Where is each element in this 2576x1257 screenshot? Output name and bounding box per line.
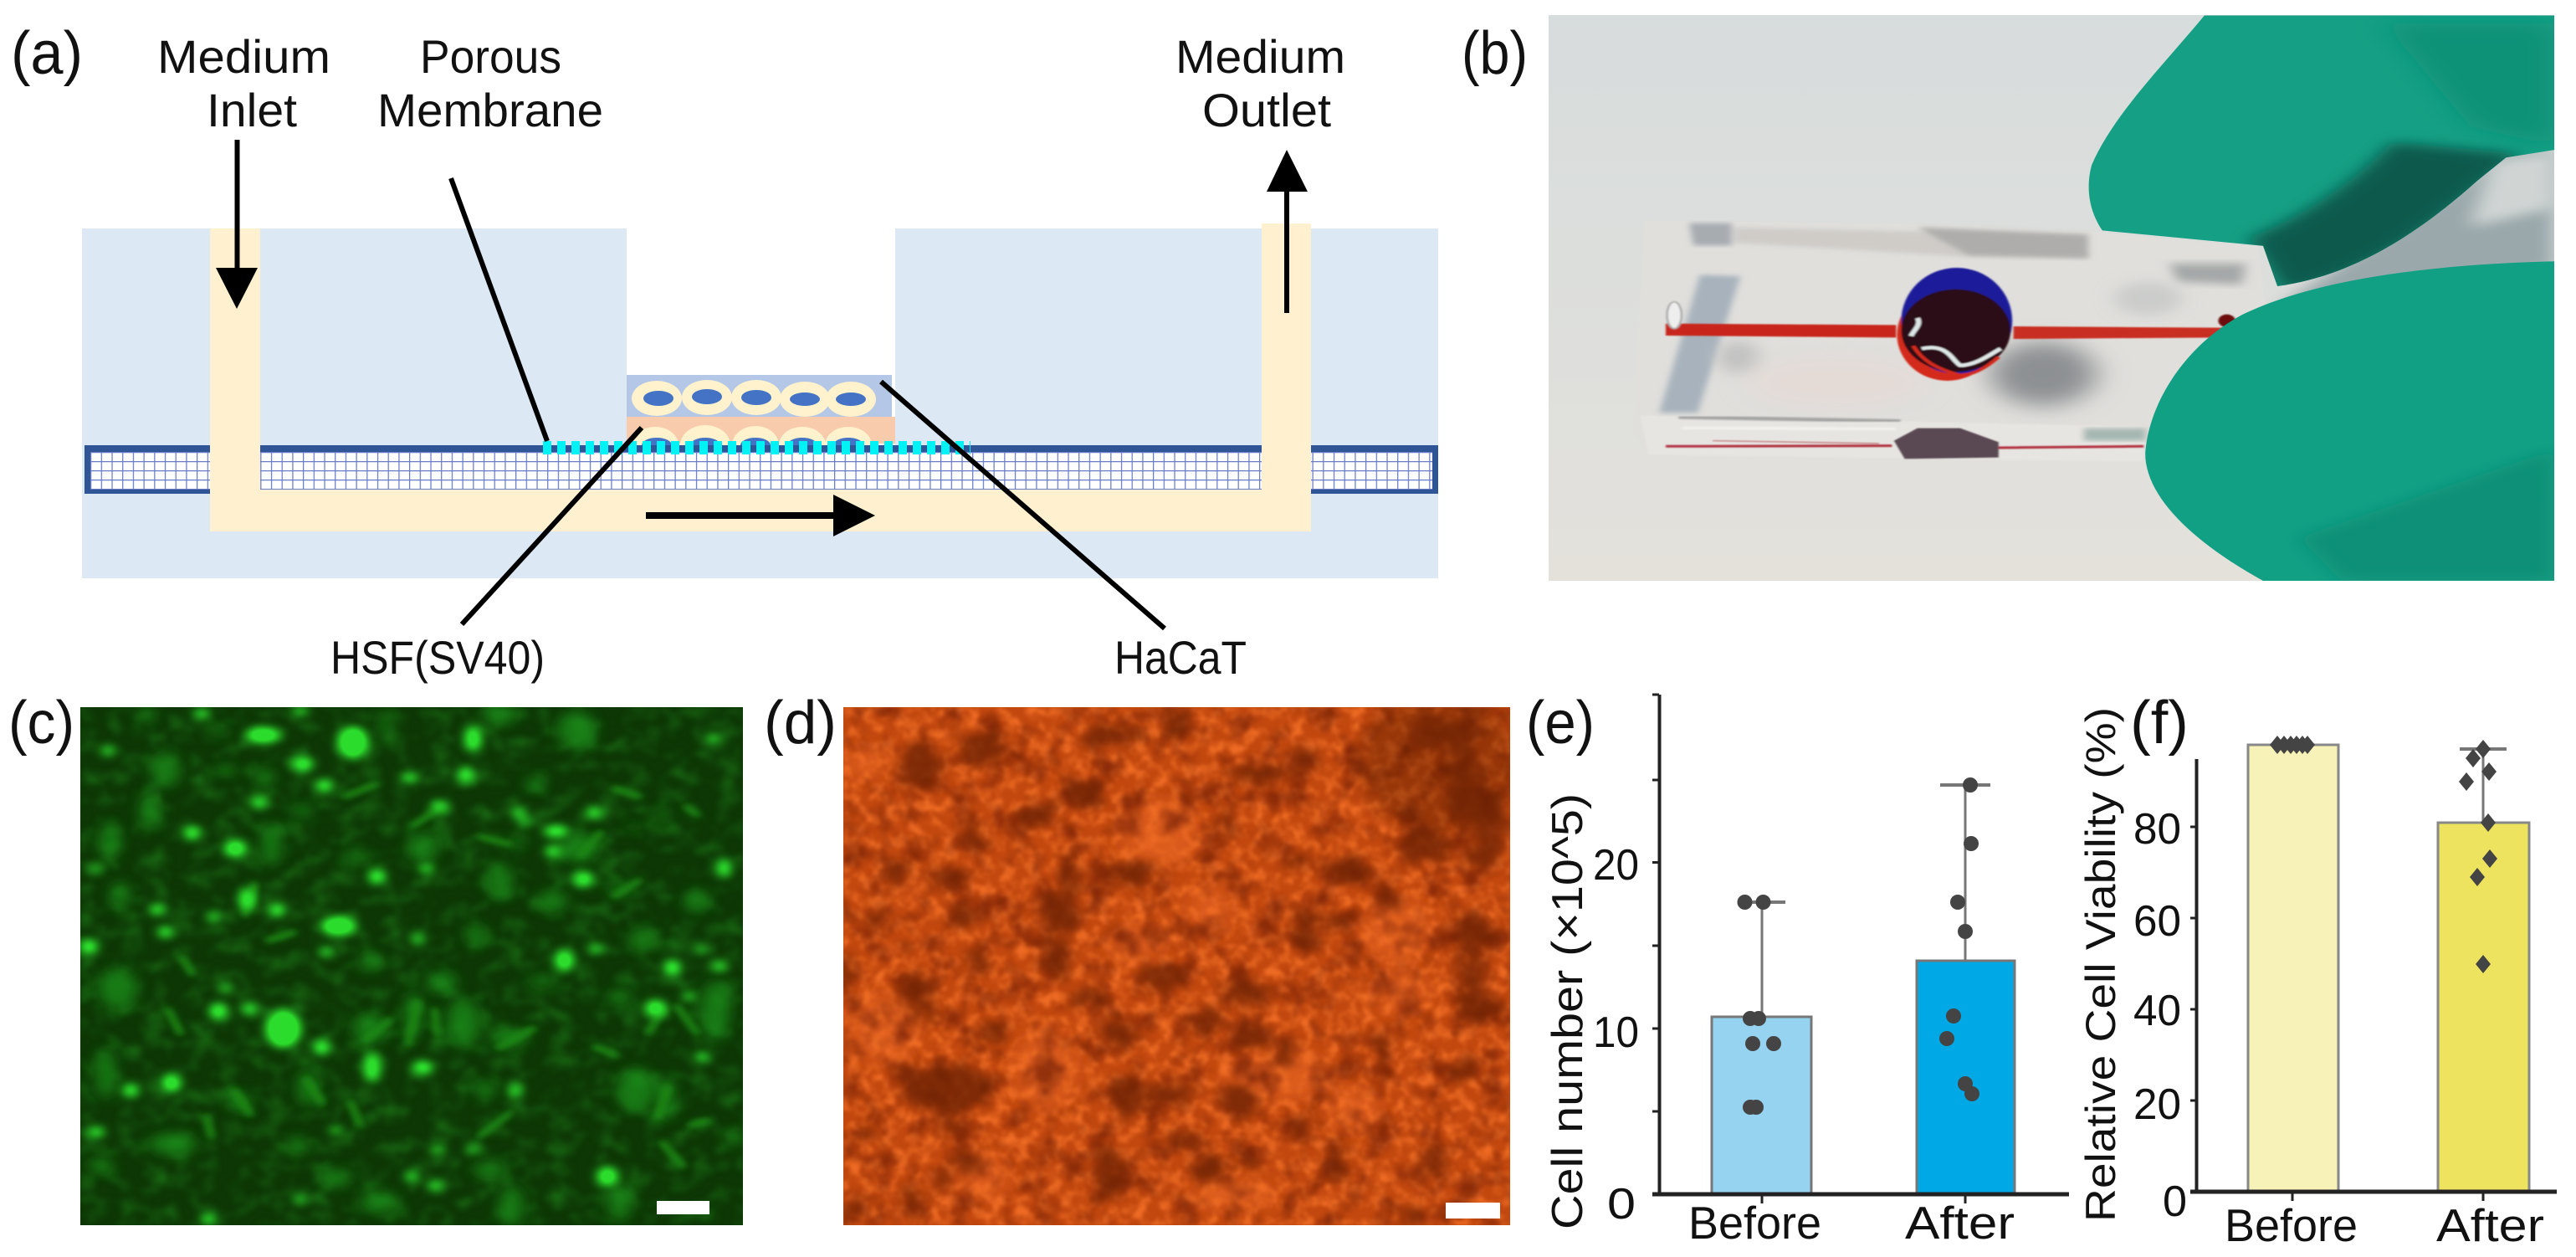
channel side view [1666,428,2143,459]
text: porous membrane: Porous [420,30,561,83]
axes [1652,695,2069,1203]
background near top right gap [2471,151,2554,227]
panel f: relative viability bar chart [2077,690,2557,1251]
panel label f: (f) [2130,690,2189,757]
y tick labels [2133,805,2187,1226]
panel e: cell number bar chart [1526,690,2069,1249]
text: HSF: HSF(SV40) [330,631,545,684]
y tick labels: 40 [2133,987,2181,1035]
y tick labels: 0 [1607,1180,1636,1229]
cell chamber [627,375,895,465]
HSF cell layer [632,425,872,465]
panel a: chip schematic [11,20,1438,684]
transparent chip [1634,220,2266,462]
panel c: green fluorescence micrograph [8,690,743,1226]
bars [1712,961,2015,1194]
arrow: inlet [216,140,258,309]
medium channel [210,223,1311,531]
red channel [1666,302,2235,339]
error bars [1738,785,1990,1017]
y axis title: Relative Cell Viability (%) [2077,707,2124,1222]
text: medium outlet: Medium [1175,30,1345,83]
text: porous membrane: Membrane [377,84,603,136]
x tick labels [2225,1199,2544,1251]
coating on membrane [543,441,970,454]
y tick labels: 20 [2133,1080,2181,1129]
text: medium inlet [157,30,330,136]
x tick labels: Before [1688,1197,1821,1249]
leader lines [451,178,1165,628]
text: medium inlet: Medium [157,30,330,83]
x tick labels: After [1905,1197,2015,1249]
panel label e: (e) [1526,690,1595,757]
x tick labels: Before [2225,1199,2358,1251]
photograph [1549,15,2556,584]
spindle cell fibres [168,785,706,1166]
arrow: outlet [1267,150,1308,313]
panel b: device photo [1462,15,2556,584]
lower glove finger [2142,261,2556,584]
micrograph [80,704,743,1226]
arrow: flow [646,495,875,536]
panel label a: (a) [11,20,83,87]
scale bar c [657,1201,709,1214]
axes [2190,759,2557,1201]
text: medium outlet [1175,30,1345,136]
data points [1737,777,1979,1115]
data points [2270,736,2497,973]
panel label c: (c) [8,690,74,757]
HaCaT cell layer [632,380,876,417]
x tick labels [1688,1197,2015,1249]
bars [2248,745,2529,1192]
shadow between fingers [2277,150,2554,307]
x tick labels: After [2436,1199,2544,1251]
panel d: orange fluorescence micrograph [764,690,1521,1226]
chip body [82,228,1438,578]
panel label d: (d) [764,690,837,757]
scale bar d [1446,1203,1500,1219]
y tick labels [1593,841,1639,1229]
micrograph [842,693,1521,1226]
upper glove finger [2070,15,2556,292]
error bars [2460,749,2507,823]
porous membrane [85,445,1438,494]
y tick labels: 0 [2163,1177,2187,1226]
panel label b: (b) [1462,20,1528,87]
y tick labels: 20 [1593,841,1639,890]
culture well [1897,268,2012,381]
y tick labels: 10 [1593,1008,1639,1057]
y axis title: Cell number (×10^5) [1544,793,1592,1229]
text: medium outlet: Outlet [1202,84,1331,136]
y tick labels: 80 [2133,805,2181,854]
text: HaCaT: HaCaT [1114,631,1247,684]
y tick labels: 60 [2133,897,2181,946]
text: porous membrane [377,30,603,136]
text: medium inlet: Inlet [207,84,297,136]
